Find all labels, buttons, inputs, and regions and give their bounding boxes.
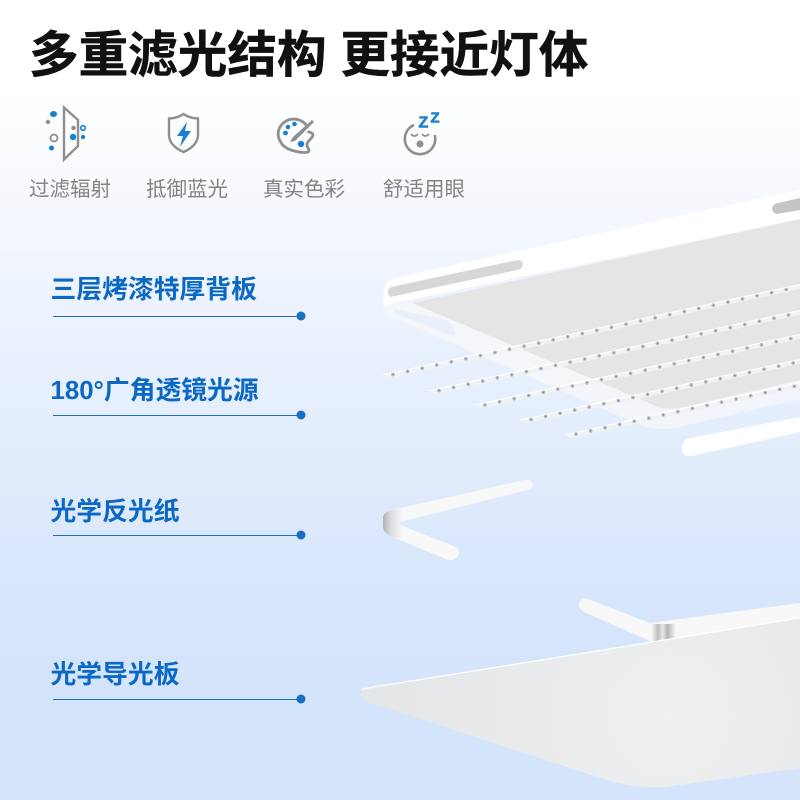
strip 1 xyxy=(383,284,800,378)
caption: true colour: 真实色彩 xyxy=(263,178,345,200)
right slot xyxy=(772,198,800,214)
label: LED xyxy=(50,376,306,420)
front bar xyxy=(682,417,800,456)
upper arm xyxy=(383,480,533,530)
icon: sleeping face: Z xyxy=(418,114,428,132)
icon: sleeping face xyxy=(404,110,440,156)
left slot xyxy=(388,260,523,297)
strip 4 xyxy=(520,360,800,423)
strip 5 xyxy=(565,382,800,438)
top reflector strip xyxy=(579,598,800,642)
back panel xyxy=(383,190,800,429)
icon: shield with bolt xyxy=(168,112,200,154)
label: back panel xyxy=(50,276,306,320)
caption: eye comfort: 舒适用眼 xyxy=(383,178,465,200)
caption: filter radiation: 过滤辐射 xyxy=(29,178,111,200)
caption: block blue light: 抵御蓝光 xyxy=(146,178,228,200)
light guide plate xyxy=(361,598,800,787)
label: LED: 180°广角透镜光源 xyxy=(50,377,259,405)
icon: sleeping face: Z xyxy=(430,110,440,126)
icon: filter radiation xyxy=(46,105,86,162)
frame lower band xyxy=(383,300,800,429)
label: back panel: 三层烤漆特厚背板 xyxy=(50,276,257,304)
plate xyxy=(361,618,800,787)
label: reflective paper: 光学反光纸 xyxy=(50,498,180,526)
silver fold xyxy=(652,624,676,642)
title: 多重滤光结构 更接近灯体 xyxy=(29,27,588,83)
white top rim xyxy=(383,190,800,305)
label: reflective paper xyxy=(50,498,306,540)
gray panel xyxy=(412,219,800,409)
strip 3 xyxy=(475,334,800,408)
label: light guide: 光学导光板 xyxy=(50,661,180,689)
lower arm xyxy=(393,524,459,560)
strip 2 xyxy=(428,310,800,394)
fold xyxy=(383,508,403,539)
frame cut-out slot xyxy=(393,309,455,336)
icon: palette xyxy=(276,118,314,154)
reflective paper xyxy=(383,480,533,560)
LED strips xyxy=(383,284,800,438)
label: light guide xyxy=(50,660,306,704)
